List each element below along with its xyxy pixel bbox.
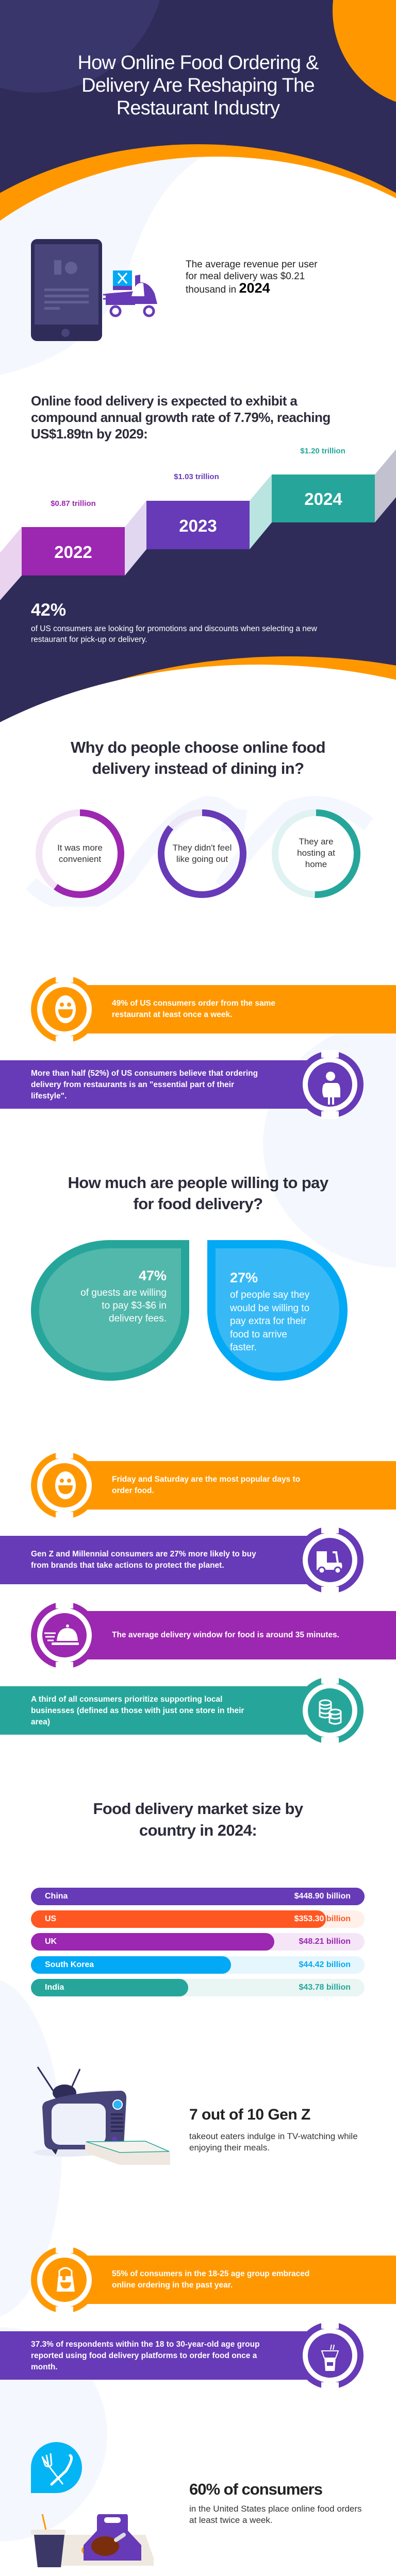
value labels: $1.03 trillion xyxy=(174,472,219,481)
bar: South Korea: $44.42 billion xyxy=(299,1960,351,1969)
icon: fork and knife drop xyxy=(31,2442,82,2493)
drop: 47%: delivery fees. xyxy=(109,1313,167,1324)
banner: local businesses: businesses (defined as those with just one store in their xyxy=(31,1706,244,1715)
illustration: TV with pizza box xyxy=(34,2066,170,2165)
circle: more convenient: It was more xyxy=(57,843,103,853)
drop: 27%: of people say they xyxy=(230,1290,309,1300)
stat: 7 out of 10 Gen Z: 7 out of 10 Gen Z xyxy=(189,2106,310,2123)
bar: UK: $48.21 billion xyxy=(299,1937,351,1946)
title: Delivery Are Reshaping The xyxy=(81,75,315,96)
why heading: Why do people choose online food xyxy=(71,738,325,756)
bar 2022 xyxy=(22,527,125,575)
bar: China: $448.90 billion xyxy=(294,1892,351,1901)
stat: 42%: restaurant for pick-up or delivery. xyxy=(31,635,147,644)
willing heading xyxy=(68,1174,328,1213)
banner: 55% 18-25 xyxy=(31,2247,396,2312)
value labels xyxy=(51,447,345,508)
banner: Friday and Saturday: order food. xyxy=(112,1486,154,1495)
circle: more convenient xyxy=(36,809,124,898)
revenue text: for meal delivery was $0.21 xyxy=(186,271,305,282)
drop: 47%: of guests are willing xyxy=(80,1287,167,1298)
stat: 7 out of 10 Gen Z: enjoying their meals. xyxy=(189,2143,270,2153)
drop: 27%: would be willing to xyxy=(230,1302,309,1314)
circle: hosting at home: hosting at xyxy=(297,848,335,858)
bar: US xyxy=(31,1910,365,1928)
drop: 27%: food to arrive xyxy=(230,1329,287,1340)
bar: UK xyxy=(31,1933,365,1951)
circle: more convenient: convenient xyxy=(59,854,101,864)
bar 2024: 2024 xyxy=(304,489,342,509)
banner: local businesses xyxy=(0,1678,364,1743)
stat: 42%: 42% xyxy=(31,600,66,620)
banner: 37.3% once a month xyxy=(0,2323,364,2388)
bar 2023 xyxy=(146,501,250,549)
value labels: $0.87 trillion xyxy=(51,499,96,508)
banner: Gen Z planet xyxy=(0,1528,364,1592)
market size bar chart xyxy=(31,1888,365,1996)
banner: 37.3% once a month: month. xyxy=(31,2363,58,2371)
circle: didn't feel like going out: They didn't feel xyxy=(173,843,232,853)
bar: India xyxy=(31,1979,365,1996)
banner: 52% essential lifestyle: delivery from restaurants is an "essential part of their xyxy=(31,1080,234,1089)
bar 2023: 2023 xyxy=(179,516,217,535)
drop: 27%: pay extra for their xyxy=(230,1316,306,1327)
why heading xyxy=(71,738,325,777)
left light blobs xyxy=(0,1980,107,2541)
banner: 37.3% once a month: reported using food delivery platforms to order food once a xyxy=(31,2351,257,2360)
title xyxy=(77,52,319,119)
bar: US: $353.30 billion xyxy=(294,1914,351,1923)
value labels: $1.20 trillion xyxy=(300,447,345,455)
growth heading: compound annual growth rate of 7.79%, reaching xyxy=(31,410,331,425)
banner: 49% same restaurant: restaurant at least once a week. xyxy=(112,1010,232,1019)
banner: Gen Z planet: from brands that take actions to protect the planet. xyxy=(31,1561,224,1570)
bar: South Korea xyxy=(31,1956,365,1974)
faint swoosh decoration xyxy=(26,796,373,907)
banner: 55% 18-25: 55% of consumers in the 18-25 age group embraced xyxy=(112,2269,309,2278)
banner: Friday and Saturday: Friday and Saturday are the most popular days to xyxy=(112,1475,300,1484)
bar: US: US xyxy=(45,1914,56,1923)
title: How Online Food Ordering & xyxy=(77,52,319,74)
bar: China xyxy=(31,1888,365,1905)
circle: hosting at home: home xyxy=(305,859,327,869)
banner: 49% same restaurant: 49% of US consumers order from the same xyxy=(112,999,275,1008)
drop: 27%: 27% xyxy=(230,1270,258,1285)
banner: 55% 18-25: online ordering in the past year. xyxy=(112,2281,233,2290)
revenue text: The average revenue per user xyxy=(186,259,318,270)
banner: 35 minutes: The average delivery window for food is around 35 minutes. xyxy=(112,1631,339,1639)
drop: 47% xyxy=(31,1240,189,1381)
light blob decorations xyxy=(263,1033,396,1267)
title: Restaurant Industry xyxy=(117,97,279,119)
market heading: Food delivery market size by xyxy=(93,1800,303,1818)
stat: 60% of consumers: at least twice a week. xyxy=(189,2515,273,2525)
banner: local businesses: area) xyxy=(31,1718,50,1726)
revenue text: thousand in 2024 xyxy=(186,280,270,296)
willing heading: for food delivery? xyxy=(133,1195,263,1213)
bar 2022: 2022 xyxy=(54,543,92,562)
bar: India: India xyxy=(45,1983,64,1992)
willing heading: How much are people willing to pay xyxy=(68,1174,328,1192)
stat: 42% xyxy=(31,600,317,644)
banner: local businesses: A third of all consumers prioritize supporting local xyxy=(31,1695,222,1704)
stat: 60% of consumers xyxy=(189,2480,362,2525)
reason circles xyxy=(36,809,360,898)
banner: 52% essential lifestyle: More than half (52%) of US consumers believe that ordering xyxy=(31,1069,258,1078)
bar: UK: UK xyxy=(45,1937,57,1946)
banner: 35 minutes xyxy=(31,1603,396,1668)
banner: 52% essential lifestyle xyxy=(0,1050,364,1119)
growth heading: US$1.89tn by 2029: xyxy=(31,426,147,442)
market heading xyxy=(93,1800,303,1839)
stat: 42%: of US consumers are looking for promotions and discounts when selecting a new xyxy=(31,624,317,633)
market heading: country in 2024: xyxy=(139,1821,257,1839)
bar: India: $43.78 billion xyxy=(299,1983,351,1992)
header background xyxy=(0,0,396,375)
banner: 49% same restaurant xyxy=(31,977,396,1042)
drop: 27%: faster. xyxy=(230,1342,257,1353)
drop: 47%: 47% xyxy=(139,1268,167,1283)
drop: 27% xyxy=(207,1240,348,1381)
banner: 52% essential lifestyle: lifestyle". xyxy=(31,1092,67,1100)
illustration: food bag, drink and pizza xyxy=(31,2514,154,2567)
bar 2024 xyxy=(272,474,375,522)
circle: didn't feel like going out xyxy=(158,809,246,898)
growth heading xyxy=(31,393,331,442)
growth heading: Online food delivery is expected to exhibit a xyxy=(31,393,297,409)
why heading: delivery instead of dining in? xyxy=(92,759,304,777)
revenue text xyxy=(186,259,318,296)
banner: Gen Z planet: Gen Z and Millennial consumers are 27% more likely to buy xyxy=(31,1550,256,1558)
circle: hosting at home xyxy=(272,809,360,898)
banner: Friday and Saturday xyxy=(31,1453,396,1518)
stat: 60% of consumers: 60% of consumers xyxy=(189,2480,322,2498)
banner: 37.3% once a month: 37.3% of respondents within the 18 to 30-year-old age group xyxy=(31,2340,260,2349)
stat: 60% of consumers: in the United States place online food orders xyxy=(189,2504,362,2514)
circle: hosting at home: They are xyxy=(299,837,334,846)
growth staircase chart xyxy=(0,447,396,722)
bar: South Korea: South Korea xyxy=(45,1960,94,1969)
illustration: tablet and scooter xyxy=(31,239,157,341)
stat: 7 out of 10 Gen Z xyxy=(189,2106,358,2153)
drop: 47%: to pay $3-$6 in xyxy=(102,1300,167,1311)
stat: 7 out of 10 Gen Z: takeout eaters indulge in TV-watching while xyxy=(189,2131,358,2141)
bar: China: China xyxy=(45,1892,68,1901)
circle: didn't feel like going out: like going out xyxy=(176,854,228,864)
